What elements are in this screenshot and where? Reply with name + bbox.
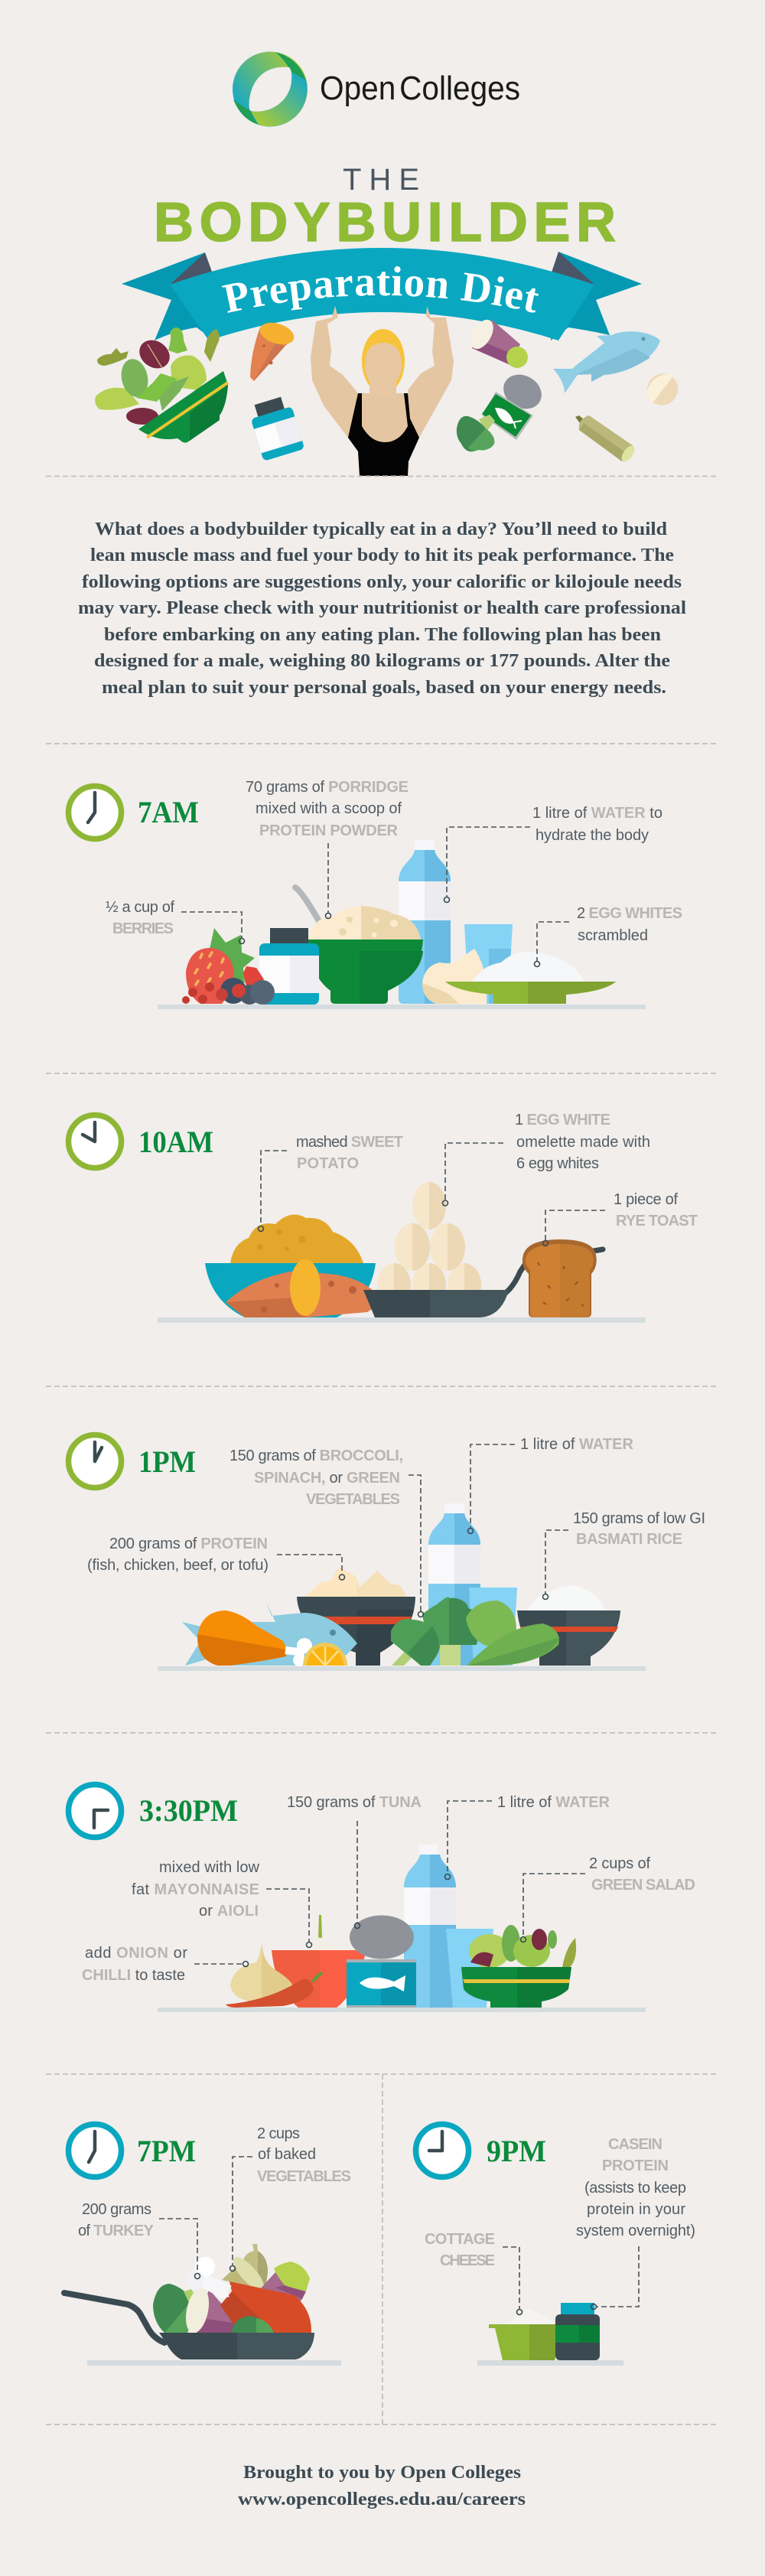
time: 9PM: 9PM [487,2134,546,2168]
labels: 9PM: protein in your [587,2201,685,2218]
icon: glass [469,1588,517,1666]
text block: introduction: meal plan to suit your personal goals, based on your energy needs. [102,677,666,698]
text block: introduction: following options are suggestions only, your calorific or kilojoule needs [82,572,682,592]
divider [46,1073,718,1074]
divider [46,1386,718,1387]
labels: 9PM: COTTAGE [425,2231,495,2248]
icon: eggs [377,1182,481,1290]
labels: 10AM: mashed SWEET [296,1134,403,1151]
icon: casein jar [555,2303,600,2360]
icon: sweet potato [250,319,297,381]
leaders: 10AM [259,1143,605,1246]
divider [46,476,718,477]
icon: protein jar [259,928,319,1005]
labels: 3:30PM [82,1794,695,1984]
icon: protein bowl [297,1567,415,1666]
icon: zucchini [575,415,637,464]
panel: 7AM [69,779,682,1009]
labels: 7AM [106,779,682,944]
labels: 7PM: of TURKEY [78,2223,155,2239]
icon: egg whites on plate [445,952,616,1004]
panel: 1PM [69,1435,705,1671]
icon: garlic and red bowl [272,1915,366,2008]
panel: 3:30PM [69,1784,695,2012]
panel: 10AM [69,1112,698,1323]
icon: frying pan [64,2293,314,2359]
icon: tin [482,368,548,440]
divider [46,743,718,744]
icon: baked vegetables [153,2244,311,2335]
labels: 10AM: 1 EGG WHITE [515,1112,610,1128]
labels: 7AM: 70 grams of PORRIDGE [246,779,409,796]
icon: mash bowl [205,1215,376,1317]
labels: 7AM: BERRIES [112,920,174,937]
time: 7AM: 7AM [138,795,199,829]
labels: 7AM: ½ a cup of [106,899,174,916]
labels: 9PM: (assists to keep [584,2180,686,2197]
icon: water bottle [428,1503,480,1666]
icon: rye toast [522,1239,597,1317]
icon: strawberry and berries [182,928,275,1005]
text block: introduction: lean muscle mass and fuel your body to hit its peak performance. The [90,545,674,565]
icon: green salad [461,1925,576,2008]
labels: 1PM: BASMATI RICE [576,1531,682,1548]
clock: 3:30PM [69,1784,121,1838]
labels: 7PM: of baked [258,2146,316,2163]
labels: 10AM: 1 piece of [614,1191,678,1208]
icon: frying pan [363,1249,603,1317]
divider [382,2074,383,2425]
labels: 3:30PM: 1 litre of WATER [497,1794,610,1811]
time: 1PM: 1PM [138,1444,196,1479]
leaders: 3:30PM [194,1801,585,1966]
icon: porridge bowl [308,906,423,1004]
time: 10AM: 10AM [138,1125,213,1159]
icon: fish [553,331,660,393]
labels: 10AM: POTATO [297,1155,359,1172]
title: THE: THE [343,163,419,197]
text block: introduction: before embarking on any eating plan. The following plan has been [104,624,661,645]
labels: 7AM: mixed with a scoop of [256,800,402,817]
labels: 7AM: scrambled [578,927,648,944]
labels: 9PM: system overnight) [576,2223,695,2239]
labels: 7PM: VEGETABLES [257,2168,351,2185]
labels: 9PM: PROTEIN [602,2158,669,2174]
text block: introduction: designed for a male, weighing 80 kilograms or 177 pounds. Alter the [94,650,670,671]
icon: spoon [295,887,322,927]
labels: 1PM: 200 grams of PROTEIN [109,1536,268,1552]
labels: 9PM: CHEESE [440,2252,495,2269]
icon: chicken drumstick [197,1610,312,1666]
icon: onion [230,1943,294,2002]
shelf [477,2360,623,2366]
icon: broccoli [457,415,495,451]
labels: 1PM: 150 grams of BROCCOLI, [230,1448,403,1464]
panel: 7PM [64,2124,351,2366]
clock: 9PM [416,2124,468,2177]
clock: 10AM [69,1115,121,1168]
leaders: 1PM [277,1444,568,1617]
divider [46,1732,718,1734]
leaders: 7PM [159,2157,252,2278]
labels: 1PM [87,1436,705,1574]
labels: 7PM: 2 cups [257,2125,300,2142]
labels: 3:30PM: GREEN SALAD [591,1877,695,1894]
leaders: 9PM [503,2246,639,2315]
labels: 3:30PM: add ONION or [85,1945,187,1962]
labels: 3:30PM: or AIOLI [199,1903,259,1920]
icon: glass [446,1929,493,2008]
labels: 10AM: omelette made with [516,1134,650,1151]
icon: supplement jar [247,395,304,461]
labels: 7AM: 1 litre of WATER to [532,805,662,822]
labels: 3:30PM: 2 cups of [589,1855,650,1872]
labels: 1PM: 1 litre of WATER [520,1436,634,1453]
shelf [87,2360,341,2366]
shelf [158,1317,646,1323]
labels: 3:30PM: fat MAYONNAISE [132,1881,259,1898]
footer: Brought to you by Open Colleges [243,2462,521,2483]
clock: 7PM [69,2124,121,2177]
icon: rice bowl [517,1585,620,1666]
icon: salad and bowl [95,327,228,443]
icon: spinach [466,1601,560,1666]
shelf [158,1005,646,1009]
icon: broccoli [391,1597,480,1666]
icon: lemon [303,1643,347,1666]
text block: introduction: What does a bodybuilder typically eat in a day? You’ll need to build [95,519,667,539]
icon: cottage cheese tub [489,2309,567,2360]
logo: Open Colleges [233,52,520,127]
figure: bodybuilder [311,306,454,476]
shelf [158,1666,646,1671]
labels: 9PM: CASEIN [608,2136,662,2153]
icon: water bottle [404,1845,456,2008]
icon: chilli [226,1972,322,2008]
labels: 1PM: 150 grams of low GI [573,1510,705,1527]
shelf [158,2008,646,2012]
text block: introduction [78,519,686,698]
text block: introduction: may vary. Please check with your nutritionist or health care professional [78,598,686,618]
labels: 9PM [425,2136,695,2269]
labels: 1PM: VEGETABLES [306,1491,400,1508]
panel: 9PM [416,2124,695,2366]
divider [46,2424,718,2425]
title: BODYBUILDER: BODYBUILDER [154,192,616,253]
banner: Preparation Diet [122,248,642,340]
labels: 1PM: (fish, chicken, beef, or tofu) [87,1557,269,1574]
icon: fish [182,1601,357,1666]
footer [238,2462,526,2509]
icon: tuna can [347,1916,416,2008]
labels: 1PM: SPINACH, or GREEN [254,1470,400,1487]
clock: 1PM [69,1435,121,1487]
icon: sweet potato [226,1259,383,1317]
icon: water bottle [399,840,451,1004]
leaders: 7AM [181,827,569,967]
labels: 3:30PM: mixed with low [159,1859,260,1876]
labels: 3:30PM: 150 grams of TUNA [287,1794,422,1811]
time: 3:30PM: 3:30PM [139,1793,238,1828]
logo: Open Colleges: Open Colleges [320,70,520,107]
labels: 10AM [296,1112,698,1229]
icon: egg [422,949,487,1004]
icon: eggplant [466,316,528,368]
labels: 7AM: PROTEIN POWDER [259,822,399,839]
time: 7PM: 7PM [137,2134,196,2168]
labels: 7AM: hydrate the body [536,827,649,844]
labels: 10AM: 6 egg whites [516,1155,599,1172]
icon: egg [641,368,684,411]
labels: 3:30PM: CHILLI to taste [82,1967,185,1984]
labels: 10AM: RYE TOAST [616,1213,698,1229]
icon: glass [464,924,513,1004]
banner: Preparation Diet: Preparation Diet [222,266,539,313]
divider [46,2073,718,2075]
labels: 7PM [78,2125,351,2239]
labels: 7AM: 2 EGG WHITES [577,905,682,922]
footer: www.opencolleges.edu.au/careers [238,2489,526,2509]
clock: 7AM [69,786,121,839]
labels: 7PM: 200 grams [82,2201,151,2218]
